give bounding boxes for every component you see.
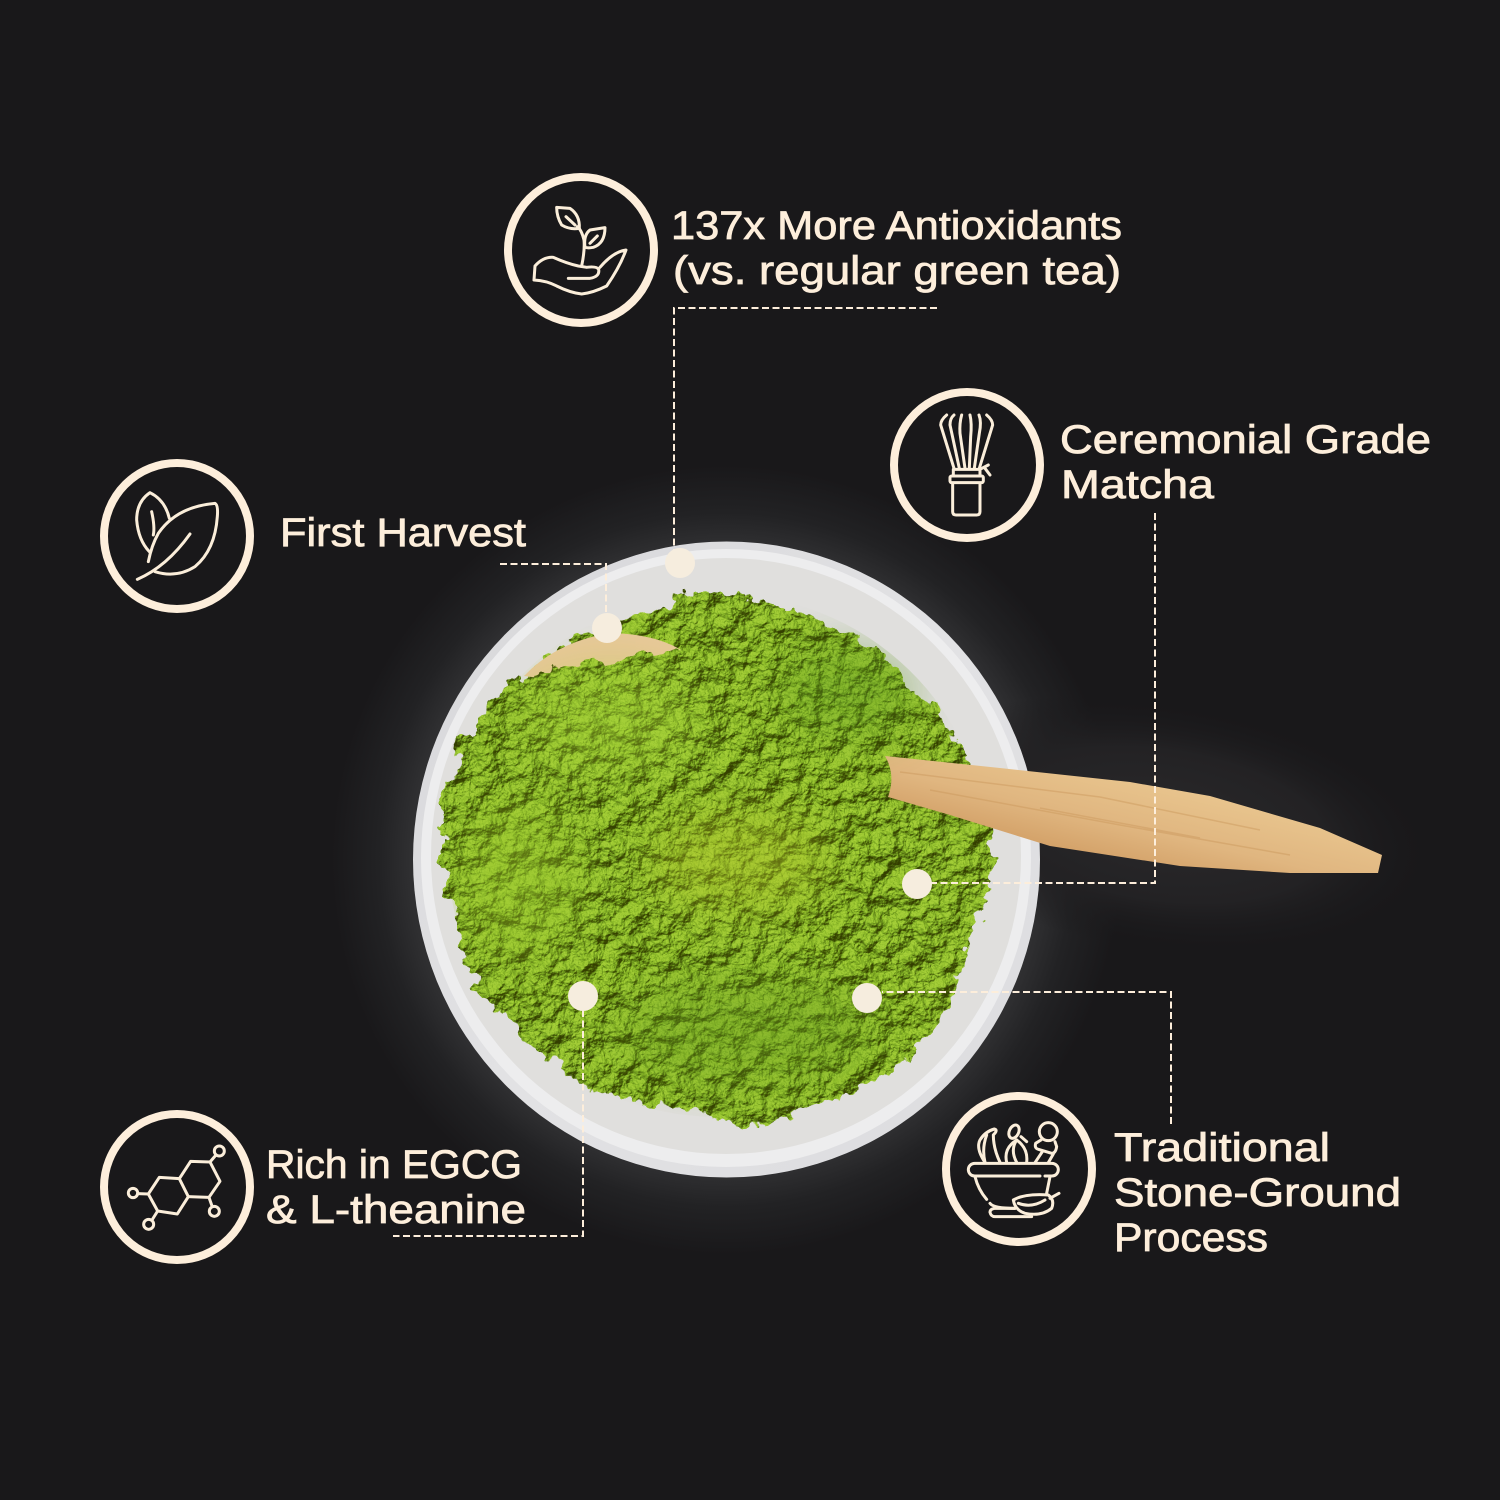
icon: tea leaves (104, 463, 250, 609)
matcha powder (442, 590, 995, 1128)
text: stone-ground process (1114, 1126, 1401, 1260)
powder on spoon tip (800, 735, 882, 790)
bowl glow (331, 465, 1121, 1255)
text: stone-ground process: Process (1114, 1216, 1268, 1260)
icon: matcha whisk (894, 392, 1040, 538)
icon: molecule (104, 1114, 250, 1260)
spoon glow (865, 662, 1455, 988)
text: EGCG and L-theanine (266, 1143, 526, 1232)
icon: plant in hand (508, 177, 654, 323)
text: ceremonial grade: Ceremonial Grade (1060, 418, 1431, 462)
marker dot: antioxidants (665, 548, 695, 578)
text: stone-ground process: Traditional (1114, 1126, 1330, 1170)
matcha bowl photo (413, 542, 1382, 1178)
connector: ceremonial grade (930, 513, 1155, 883)
bowl inner (421, 549, 1031, 1167)
connector: antioxidants (674, 308, 937, 552)
connector: first harvest (500, 564, 606, 616)
text: antioxidants: (vs. regular green tea) (673, 249, 1121, 293)
connector: EGCG (393, 1010, 583, 1236)
text: antioxidants: 137x More Antioxidants (671, 204, 1122, 248)
marker dot: first harvest (592, 613, 622, 643)
spoon bowl (524, 633, 681, 678)
text: first harvest: First Harvest (280, 511, 526, 555)
text: stone-ground process: Stone-Ground (1114, 1171, 1401, 1215)
powder shading (460, 645, 920, 1085)
spoon handle (885, 756, 1382, 873)
marker dot: EGCG (568, 981, 598, 1011)
icon: mortar and pestle (946, 1096, 1092, 1242)
marker dot: stone-ground (852, 983, 882, 1013)
text: EGCG and L-theanine: & L-theanine (266, 1188, 526, 1232)
text: EGCG and L-theanine: Rich in EGCG (266, 1143, 522, 1187)
text: antioxidants (671, 204, 1122, 293)
connector: stone-ground (882, 992, 1171, 1124)
bowl rim (413, 542, 1040, 1178)
powder covering spoon bowl (520, 650, 730, 760)
marker dot: ceremonial grade (902, 869, 932, 899)
text: ceremonial grade (1060, 418, 1431, 507)
text: ceremonial grade: Matcha (1061, 463, 1215, 507)
